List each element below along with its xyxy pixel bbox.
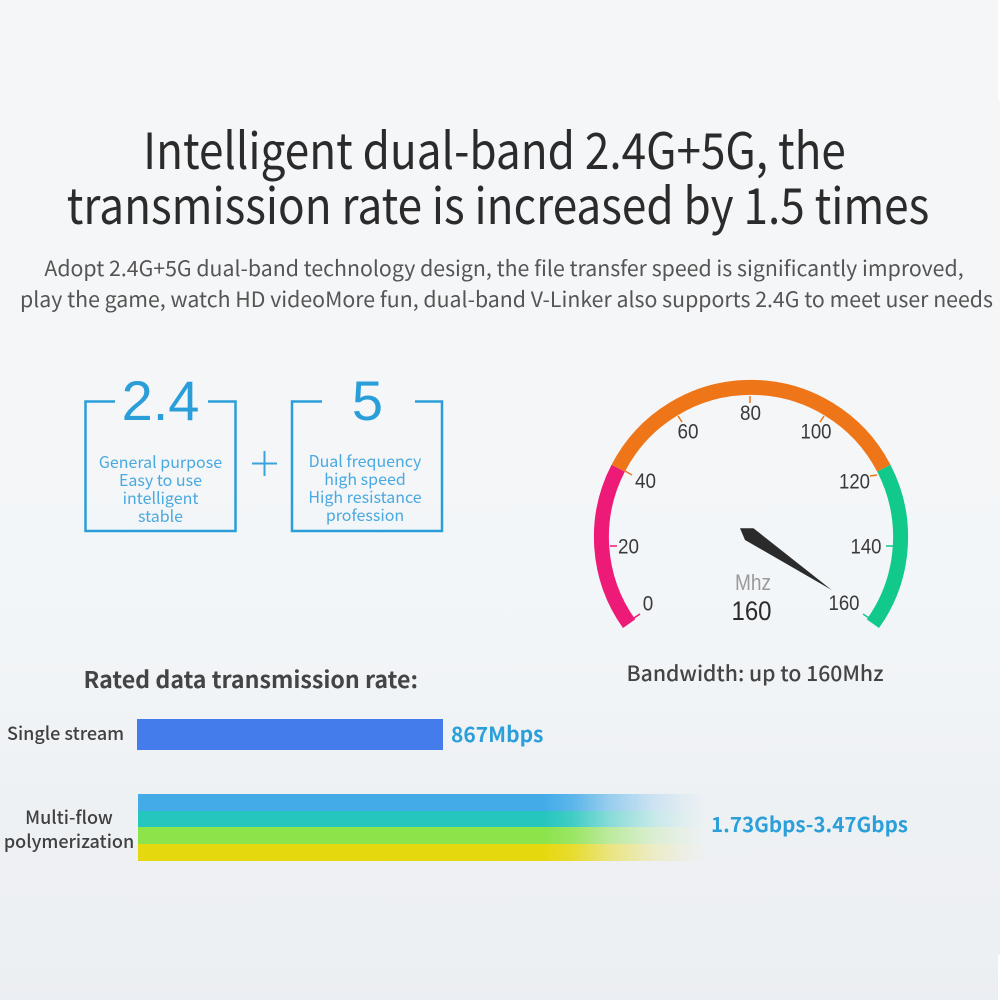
gauge arc: orange — [618, 387, 884, 468]
gauge scale labels: 100 — [800, 420, 832, 444]
box: 2.4: intelligent — [123, 485, 198, 509]
gauge scale labels: 0 — [643, 592, 653, 616]
gauge arc: pink — [601, 468, 629, 624]
box: 2.4 — [86, 369, 236, 531]
box: 5: high speed — [324, 466, 406, 490]
subtitle text — [20, 252, 993, 314]
gauge scale labels: 120 — [839, 470, 870, 494]
gauge scale labels: 40 — [635, 469, 656, 493]
subtitle text: Adopt 2.4G+5G dual-band technology design, the file transfer speed is significantly improved, — [44, 252, 964, 283]
frequency boxes — [84, 369, 444, 532]
gauge scale labels: 160 — [828, 591, 860, 615]
box: 2.4: Easy to use — [119, 467, 202, 491]
box: 2.4: 2.4 — [122, 369, 199, 432]
gauge scale labels: 60 — [678, 420, 699, 444]
gauge scale labels: 20 — [618, 534, 639, 558]
label: multi-flow polymerization: polymerization — [4, 828, 134, 854]
label: single stream: Single stream — [7, 720, 124, 746]
speedometer gauge — [594, 380, 908, 628]
gauge scale labels — [618, 401, 882, 616]
box: 5: profession — [326, 502, 404, 526]
box: 2.4: stable — [138, 503, 183, 527]
box: 5: 5 — [352, 369, 383, 432]
gauge value: 160 — [732, 596, 772, 626]
value: 867Mbps: 867Mbps — [451, 719, 543, 749]
gauge needle — [740, 528, 832, 590]
gauge scale labels: 140 — [850, 534, 882, 558]
box: 2.4: General purpose — [99, 449, 222, 473]
gauge arc: green — [873, 468, 901, 624]
bar: single stream — [137, 719, 443, 750]
value: gigabit range: 1.73Gbps-3.47Gbps — [711, 808, 908, 838]
plus sign — [252, 451, 277, 476]
title: Intelligent dual-band 2.4G+5G, the — [143, 112, 845, 184]
gauge ticks — [610, 396, 893, 618]
title: transmission rate is increased by 1.5 times — [66, 167, 929, 239]
box: 5 — [292, 369, 442, 531]
bandwidth caption: Bandwidth: up to 160Mhz — [627, 657, 883, 688]
subtitle text: play the game, watch HD videoMore fun, dual-band V-Linker also supports 2.4G to meet user needs — [20, 283, 993, 314]
gauge scale labels: 80 — [740, 401, 761, 425]
title — [66, 112, 929, 239]
gauge unit: Mhz — [735, 570, 771, 595]
box: 5: High resistance — [308, 484, 422, 508]
box: 5: Dual frequency — [309, 448, 422, 472]
label: multi-flow polymerization — [4, 804, 134, 854]
bar: multi-flow gradient stack — [138, 794, 695, 861]
label: multi-flow polymerization: Multi-flow — [25, 804, 113, 830]
rate heading: Rated data transmission rate: — [84, 661, 418, 695]
